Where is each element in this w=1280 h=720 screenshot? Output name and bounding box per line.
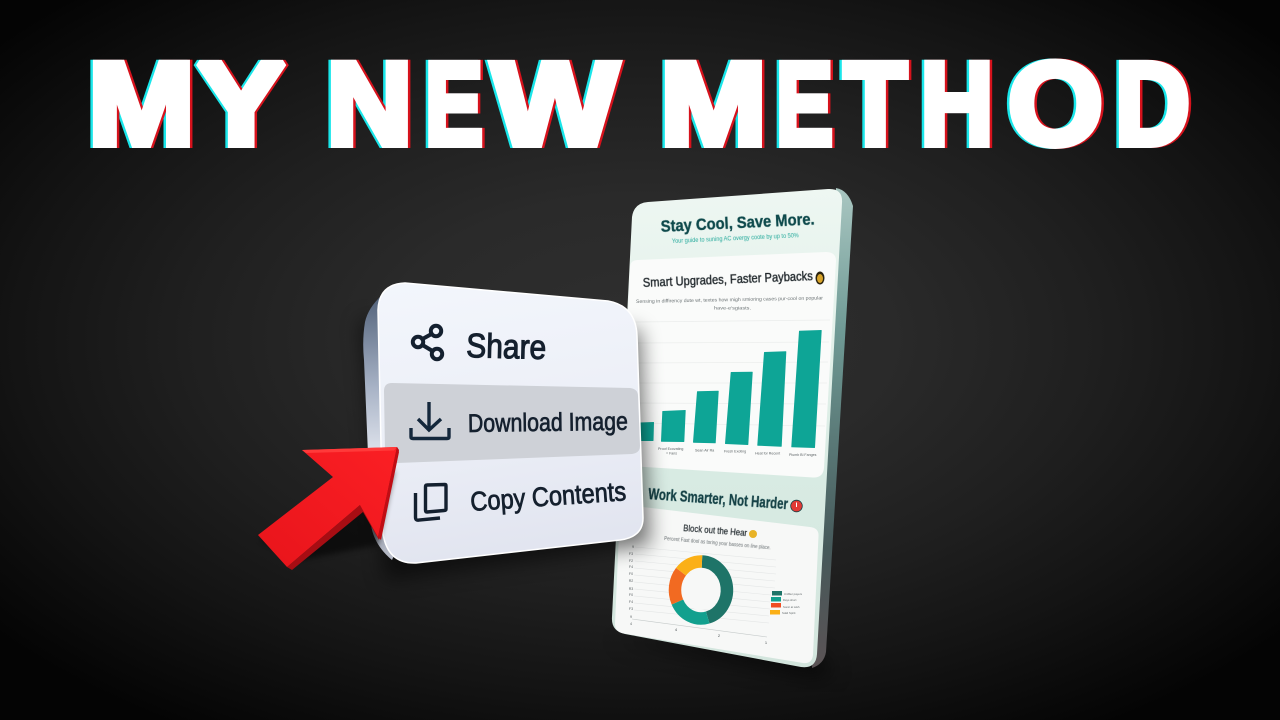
title: O (1008, 38, 1103, 170)
bars (640, 330, 821, 448)
y axis labels: F2 (629, 559, 633, 563)
axis labels: Plumb Bl Fanges (789, 453, 817, 457)
legend (770, 591, 803, 615)
label: Share (466, 327, 547, 367)
card heading: Smart Upgrades, Faster Paybacks (643, 269, 813, 290)
title: D (1118, 38, 1192, 170)
infographic heading: Stay Cool, Save More. (660, 209, 815, 236)
axis labels: Sean Air Ra (695, 448, 714, 452)
y axis labels: F0 (629, 572, 633, 576)
menu face (378, 283, 643, 563)
panel: phone infographic mockup (612, 188, 853, 680)
title: Y (200, 38, 286, 170)
title: W (494, 38, 621, 170)
y axis labels: R3 (629, 587, 633, 591)
title: E (422, 38, 480, 170)
title: H (920, 38, 994, 170)
title: H (923, 38, 996, 170)
title: D (1115, 38, 1190, 170)
title: N (324, 38, 410, 170)
infographic subtitle: Your guide to suning AC overgy coote by up to 50% (672, 232, 799, 245)
icon: badge emoji (816, 272, 824, 284)
card description: Percent Fast dool as toring your basses on line place. (664, 536, 771, 551)
card: bar chart (621, 252, 836, 478)
title: N (329, 38, 415, 170)
donut chart (675, 561, 727, 618)
y axis labels: 9 (630, 615, 632, 619)
title: N (326, 38, 412, 170)
card description: Sensing in diffirency dute wt, textes how migh smioring cases pur-cool on popular (636, 295, 823, 305)
title: M (658, 38, 764, 170)
card: donut chart (615, 505, 819, 663)
y axis labels: F4 (629, 565, 633, 569)
axis labels: Fresh Exoting (724, 450, 746, 454)
title: Y (195, 38, 281, 170)
y axis labels: F4 (629, 600, 633, 604)
title: E (776, 38, 833, 170)
x axis labels (675, 627, 768, 645)
menu side edge (363, 295, 420, 560)
legend: Days short (783, 598, 797, 602)
title: M (660, 38, 767, 170)
card description: have-e'sgiasts. (714, 306, 751, 312)
title: O (1010, 38, 1106, 170)
y axis labels: 4 (630, 622, 632, 626)
highlighted row (384, 383, 640, 463)
phone face (612, 189, 842, 667)
title: E (425, 38, 483, 170)
x axis labels: 2 (718, 633, 721, 638)
arrow (258, 447, 399, 570)
y axis labels: F0 (629, 593, 633, 597)
title: W (492, 38, 619, 170)
x axis labels: 1 (765, 640, 768, 645)
title: M (91, 38, 197, 170)
y axis labels: F3 (629, 552, 633, 556)
title: M (88, 38, 195, 170)
axis labels: Proof Ecovating (658, 447, 683, 451)
title (86, 38, 1193, 170)
title: M (663, 38, 769, 170)
x axis labels: 4 (675, 627, 678, 632)
section heading: Work Smarter, Not Harder (648, 486, 789, 513)
title: T (841, 38, 904, 170)
icon: share (413, 326, 442, 359)
axis labels: Heat for Recent (755, 452, 780, 456)
grid lines (636, 320, 830, 426)
axis labels (658, 447, 817, 457)
title: W (490, 38, 616, 170)
title: O (1006, 38, 1100, 170)
axis labels: = Fans (666, 452, 677, 456)
phone side edge (812, 188, 853, 668)
menu item: share (413, 326, 547, 367)
title: E (774, 38, 830, 170)
icon: download (411, 402, 449, 438)
y axis labels: F3 (629, 607, 633, 611)
card heading: Block out the Hear (683, 523, 747, 539)
label: Copy Contents (469, 476, 627, 517)
title: D (1112, 38, 1188, 170)
y axis labels: R2 (629, 579, 633, 583)
panel: share menu (360, 283, 650, 580)
y axis labels: 9 (632, 545, 634, 549)
title: E (428, 38, 486, 170)
title: T (846, 38, 909, 170)
legend: Solid Spirit (782, 611, 796, 615)
icon: red alert (791, 500, 802, 512)
menu item: copy contents (416, 476, 627, 520)
legend: Sonic at wish (783, 605, 800, 609)
title: H (918, 38, 991, 170)
icon: copy (416, 484, 446, 520)
title: M (86, 38, 192, 170)
legend: Unfilter payers (784, 592, 803, 596)
icon: yellow coin (749, 530, 757, 538)
title: T (844, 38, 907, 170)
label: Download Image (468, 408, 628, 438)
title: Y (197, 38, 283, 170)
card description (636, 295, 823, 312)
title: E (778, 38, 836, 170)
menu item: download image (411, 402, 628, 438)
grid lines (632, 547, 776, 637)
y axis labels (629, 545, 634, 626)
